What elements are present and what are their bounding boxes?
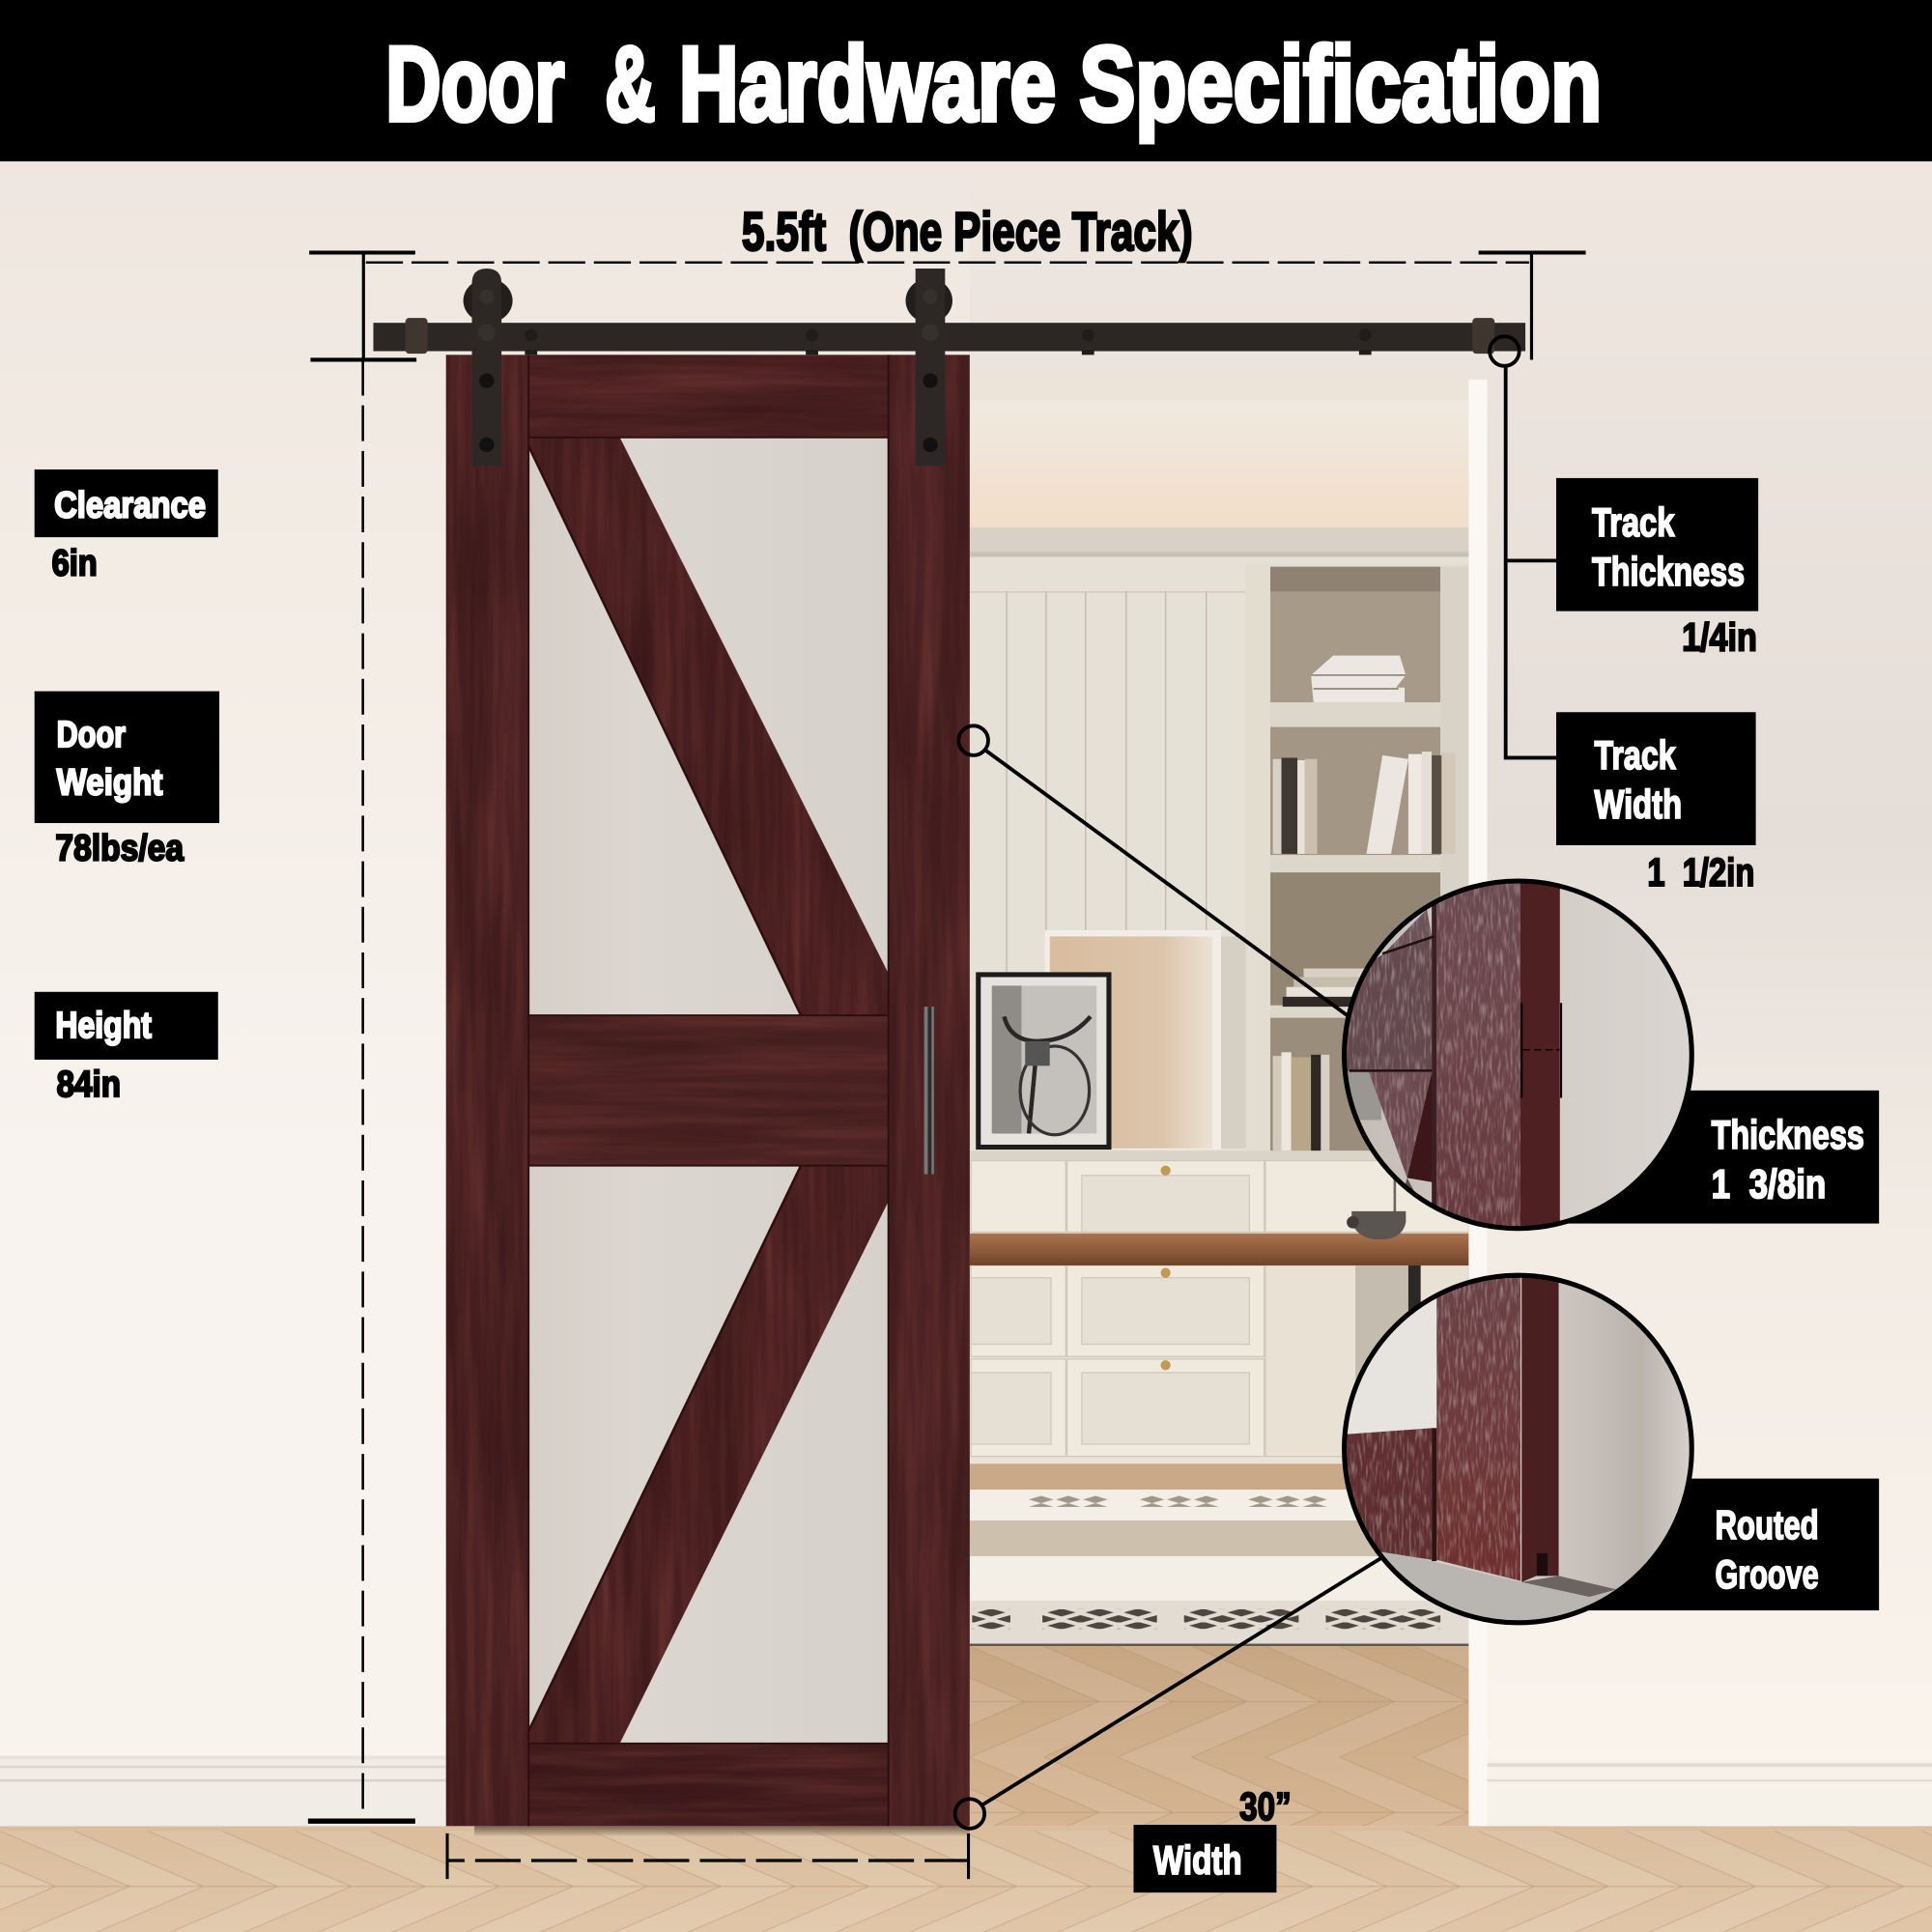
door casing — [1468, 380, 1488, 1826]
label: width: Width — [1153, 1837, 1242, 1883]
rails — [528, 355, 889, 1826]
hanger right — [906, 269, 952, 466]
sliding track — [373, 318, 1525, 355]
title text — [385, 25, 1602, 143]
label: door weight: 78lbs/ea — [55, 827, 185, 868]
hanger left — [464, 269, 513, 466]
label: track width — [1556, 712, 1756, 895]
label: height: Height — [55, 1005, 152, 1046]
leader lines and markers — [955, 336, 1556, 1829]
label: clearance — [35, 469, 218, 584]
label: door weight: Door — [57, 714, 126, 755]
label: width: 30” — [1239, 1784, 1292, 1829]
label: clearance: Clearance — [54, 485, 206, 526]
detail circle: routed groove — [1345, 1275, 1693, 1627]
doorway view into office room — [970, 380, 1488, 1826]
stiles — [446, 355, 970, 1826]
label: door weight — [35, 692, 219, 868]
beige abstract art frame — [1045, 930, 1246, 1150]
label: routed groove — [1552, 1479, 1879, 1610]
label: track width: 1 1/2in — [1647, 850, 1754, 895]
dimension lines — [308, 252, 1586, 1879]
label: track width: Track — [1595, 732, 1676, 778]
title text: & — [605, 25, 656, 143]
label: track thickness: 1/4in — [1682, 614, 1757, 659]
label: track thickness: Thickness — [1592, 549, 1745, 594]
label: track width: Width — [1595, 781, 1682, 827]
title text: Hardware — [679, 25, 1056, 143]
track stoppers — [406, 318, 1494, 354]
rug and room floor — [970, 1463, 1470, 1826]
diagonal braces — [528, 438, 889, 1744]
label: thickness — [1552, 1091, 1879, 1224]
track bolts — [525, 329, 1372, 355]
label: door weight: Weight — [57, 762, 163, 804]
title text: Specification — [1079, 25, 1602, 143]
label: routed groove: Groove — [1716, 1551, 1819, 1597]
label: thickness: Thickness — [1712, 1112, 1864, 1157]
door glass panels — [528, 438, 889, 1744]
books — [1273, 656, 1455, 1151]
sliding barn door — [446, 355, 970, 1826]
label: track thickness — [1556, 478, 1758, 659]
label: height — [35, 992, 218, 1105]
label: thickness: 1 3/8in — [1712, 1161, 1826, 1207]
heading: track length: 5.5ft (One Piece Track) — [742, 201, 1193, 262]
detail circle: door thickness — [1345, 881, 1693, 1233]
title text: Door — [385, 25, 564, 143]
black bicycle photo frame — [976, 972, 1112, 1150]
title banner — [0, 0, 1932, 161]
label: width — [1133, 1784, 1292, 1892]
bookcase shelves — [1246, 564, 1468, 1161]
walnut counter with mug — [970, 1171, 1468, 1265]
label: track thickness: Track — [1592, 499, 1675, 545]
label: height: 84in — [57, 1064, 121, 1105]
label: clearance: 6in — [52, 543, 98, 584]
cabinets — [970, 1151, 1468, 1463]
door handle — [924, 1007, 934, 1175]
label: routed groove: Routed — [1716, 1502, 1819, 1548]
